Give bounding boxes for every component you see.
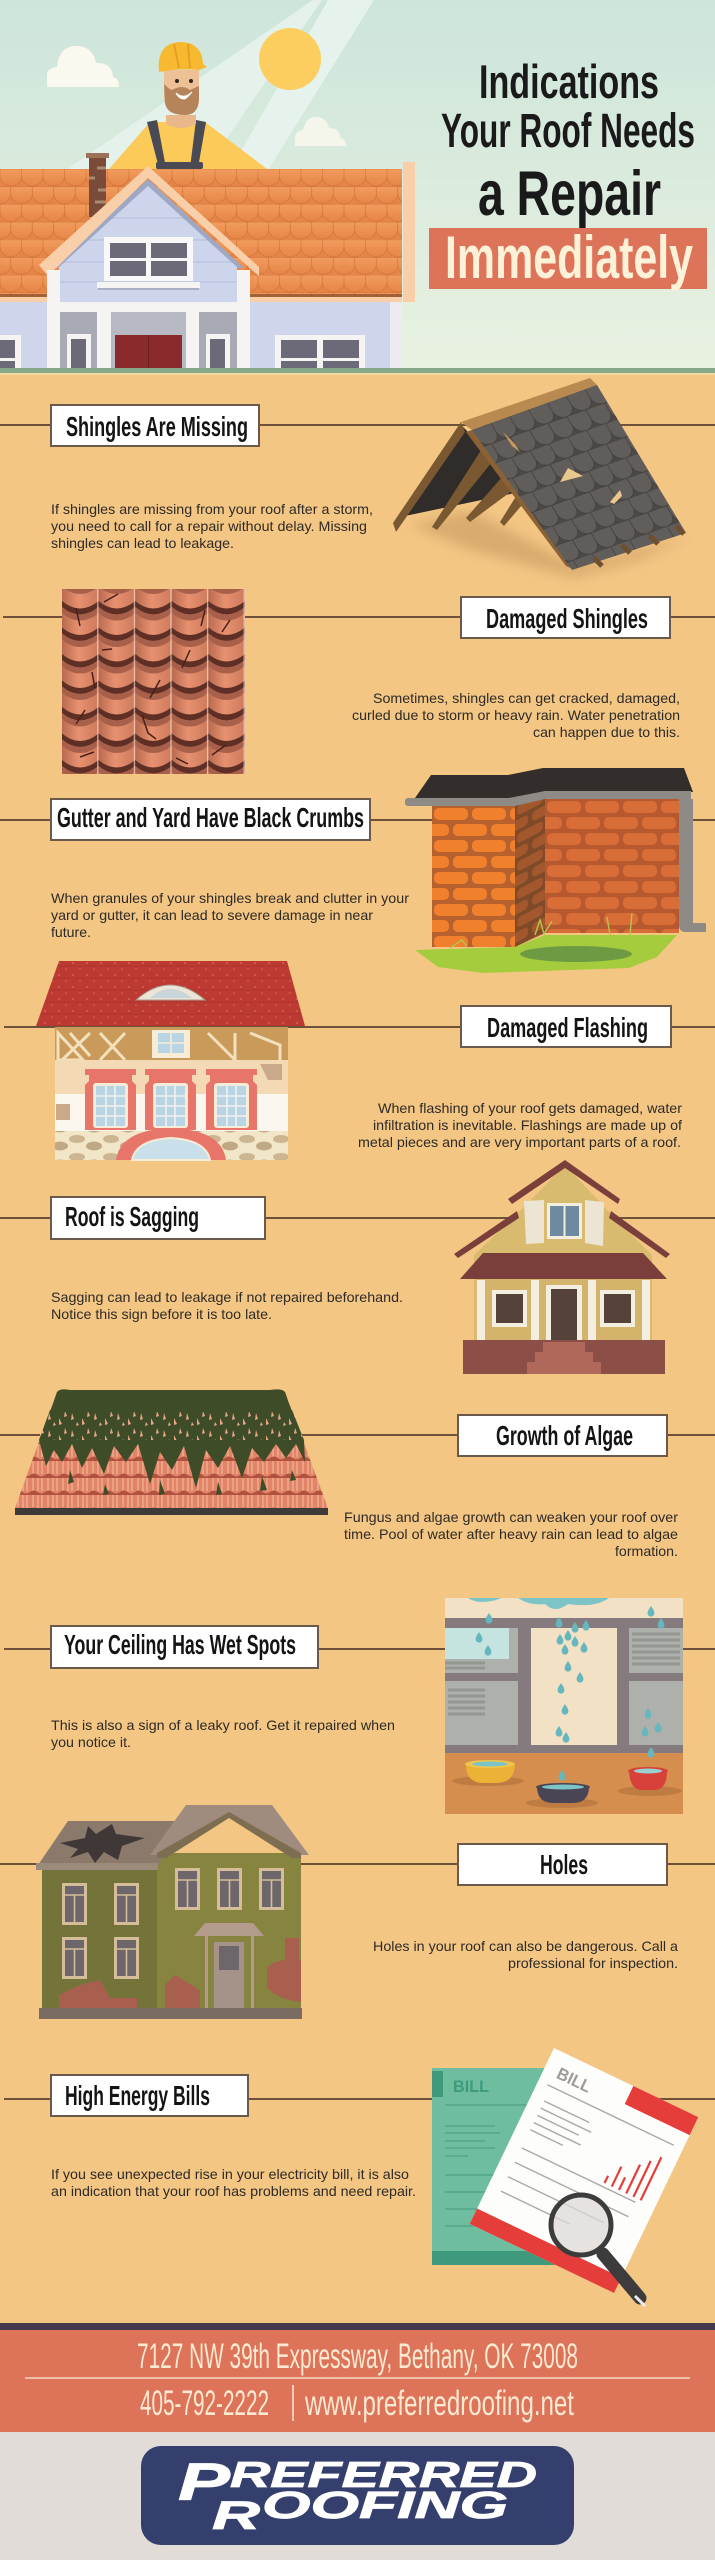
body text: When granules of your shingles break and clutter in your <box>51 890 409 906</box>
body text: formation. <box>615 1543 678 1559</box>
body text <box>51 2166 416 2199</box>
icon: sun <box>259 28 321 90</box>
body text <box>344 1509 678 1559</box>
illustration: bills and magnifier <box>432 2048 698 2306</box>
body text <box>352 690 680 740</box>
heading <box>458 1844 667 1885</box>
logo: preferred roofing: R <box>212 2494 260 2538</box>
orange roof <box>0 162 415 302</box>
title <box>429 55 707 291</box>
illustration: timber framed house with red roof <box>36 961 305 1160</box>
logo: preferred roofing: OOFING <box>262 2485 508 2527</box>
body text: you need to call for a repair without delay. Missing <box>51 518 367 534</box>
panel: high energy bills <box>4 2048 715 2306</box>
heading: High Energy Bills <box>65 2080 210 2111</box>
body text: curled due to storm or heavy rain. Water penetration <box>352 707 680 723</box>
footer contact band <box>0 2323 715 2432</box>
heading: Gutter and Yard Have Black Crumbs <box>57 802 364 833</box>
illustration: cracked clay tiles <box>62 589 245 774</box>
body text: future. <box>51 924 91 940</box>
panel: ceiling wet spots <box>4 1598 715 1814</box>
logo: preferred roofing: REFERRED <box>230 2454 537 2495</box>
heading <box>51 2075 248 2116</box>
body text <box>51 501 373 551</box>
body text: Holes in your roof can also be dangerous. Call a <box>373 1938 678 1954</box>
illustration: algae covered roof <box>15 1389 328 1515</box>
body text: you notice it. <box>51 1734 131 1750</box>
body text: This is also a sign of a leaky roof. Get it repaired when <box>51 1717 395 1733</box>
heading: Growth of Algae <box>496 1420 633 1451</box>
illustration: green house with roof hole <box>36 1805 309 2019</box>
panel: shingles are missing <box>0 378 715 578</box>
website: www.preferredroofing.net <box>304 2384 574 2423</box>
body text: shingles can lead to leakage. <box>51 535 234 551</box>
body text: professional for inspection. <box>508 1955 678 1971</box>
icon: cloud left <box>47 46 119 87</box>
heading: Your Ceiling Has Wet Spots <box>64 1629 296 1660</box>
phone: 405-792-2222 <box>140 2384 269 2423</box>
body text <box>51 890 409 940</box>
heading: Holes <box>540 1849 588 1880</box>
panel: damaged shingles <box>3 589 715 774</box>
panel: gutter and yard <box>0 768 715 973</box>
heading: Shingles Are Missing <box>66 411 248 442</box>
body text: an indication that your roof has problems and need repair. <box>51 2183 416 2199</box>
heading <box>51 1626 318 1668</box>
light beams <box>66 0 374 170</box>
body text: can happen due to this. <box>533 724 680 740</box>
heading <box>461 597 670 638</box>
body text: If shingles are missing from your roof after a storm, <box>51 501 373 517</box>
upper window <box>104 237 193 281</box>
water drops <box>476 1606 664 1781</box>
illustration: roof with missing shingles <box>393 378 690 578</box>
panel: holes <box>0 1805 715 2019</box>
green bill <box>432 2068 562 2265</box>
body text: yard or gutter, it can lead to severe damage in near <box>51 907 373 923</box>
heading <box>51 799 370 840</box>
body text: Sagging can lead to leakage if not repaired beforehand. <box>51 1289 403 1305</box>
body text <box>51 1717 395 1750</box>
magnifier <box>551 2195 645 2306</box>
icon: cloud right <box>295 117 346 146</box>
worker illustration <box>109 42 267 169</box>
house illustration <box>0 166 402 369</box>
illustration: leaking ceiling <box>445 1598 683 1814</box>
bowls <box>452 1760 682 1808</box>
heading <box>51 1197 265 1239</box>
chimney <box>86 153 109 217</box>
illustration: house with sagging roof <box>454 1160 670 1374</box>
green bill: BILL <box>453 2077 489 2096</box>
header panel <box>0 0 715 373</box>
panel: growth of algae <box>0 1389 715 1559</box>
heading: Roof is Sagging <box>65 1201 199 1232</box>
heading <box>458 1415 667 1456</box>
panel: damaged flashing <box>4 961 715 1160</box>
ground strip <box>0 368 715 373</box>
logo strip <box>0 2432 715 2560</box>
body text: Sometimes, shingles can get cracked, damaged, <box>373 690 680 706</box>
white bill <box>470 2048 698 2293</box>
panel: roof is sagging <box>0 1160 715 1374</box>
white bill: BILL <box>554 2064 594 2097</box>
body text: If you see unexpected rise in your electricity bill, it is also <box>51 2166 409 2182</box>
heading <box>51 405 259 446</box>
logo: preferred roofing: P <box>178 2453 231 2512</box>
body text <box>358 1100 682 1150</box>
body text <box>51 1289 403 1322</box>
body text: When flashing of your roof gets damaged, water <box>378 1100 682 1116</box>
illustration: brick wall with gutter <box>405 768 706 973</box>
body text: metal pieces and are very important parts of a roof. <box>358 1134 681 1150</box>
body text <box>373 1938 678 1971</box>
body text: time. Pool of water after heavy rain can lead to algae <box>344 1526 678 1542</box>
logo: preferred roofing <box>141 2446 574 2545</box>
heading <box>461 1006 671 1047</box>
body text: infiltration is inevitable. Flashings are made up of <box>373 1117 682 1133</box>
body text: Fungus and algae growth can weaken your roof over <box>344 1509 678 1525</box>
body text: Notice this sign before it is too late. <box>51 1306 272 1322</box>
